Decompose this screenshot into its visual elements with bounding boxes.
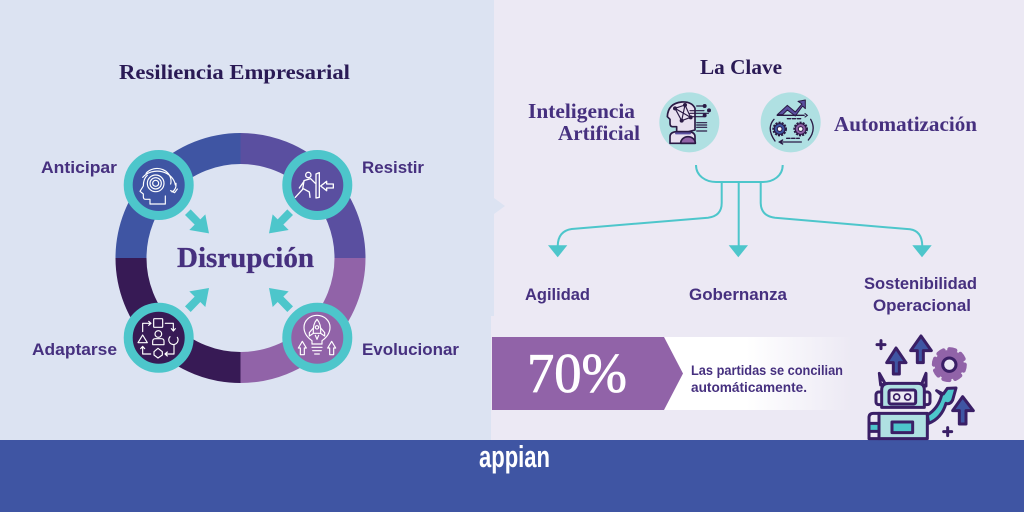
label: Automatización: Automatización (834, 112, 977, 136)
gear (938, 354, 960, 376)
heading: Resiliencia Empresarial: Resiliencia Empresarial (119, 60, 350, 84)
icon: artificial intelligence head (659, 92, 719, 152)
callout text (691, 363, 843, 395)
stat: 70%: 70% (527, 343, 627, 405)
label: Gobernanza: Gobernanza (689, 285, 788, 304)
connector: bracket and arrows (548, 165, 932, 257)
callout text: automáticamente. (691, 380, 807, 395)
icon: rocket in lightbulb (298, 315, 336, 355)
label: Sostenibilidad Operacional: Sostenibilidad (864, 274, 977, 293)
diagram: resilience cycle (32, 148, 459, 368)
label: Sostenibilidad Operacional: Operacional (873, 296, 971, 315)
callout text: Las partidas se concilian (691, 363, 843, 378)
robot ears (876, 392, 883, 405)
callout background (660, 337, 852, 410)
sparkles (877, 341, 952, 436)
panel: footer band (0, 440, 1024, 512)
icon: process shapes (138, 319, 178, 358)
robot left arm (869, 413, 879, 439)
label: Inteligencia Artificial: Inteligencia (528, 99, 635, 123)
panel: right background (491, 0, 1024, 440)
icon: robot with arrows and gear (869, 336, 973, 439)
label: Anticipar: Anticipar (41, 158, 117, 177)
robot head (882, 383, 924, 407)
callout: 70% statistic (492, 337, 852, 410)
label: Inteligencia Artificial: Artificial (558, 121, 640, 145)
callout arrow (492, 337, 683, 410)
node: Evolucionar (287, 307, 348, 368)
node: Adaptarse (128, 307, 189, 368)
label: Inteligencia Artificial (528, 99, 640, 145)
node: Anticipar (128, 154, 189, 216)
icon: automation gears (761, 92, 821, 152)
node: Resistir (287, 154, 348, 216)
icon: person pushing door (295, 172, 333, 198)
label: Disrupción: Disrupción (177, 243, 314, 274)
logo: appian: appian (479, 439, 550, 474)
label: Agilidad: Agilidad (525, 285, 590, 304)
heading: La Clave: La Clave (700, 55, 782, 79)
label: Resistir: Resistir (362, 158, 424, 177)
label: Evolucionar: Evolucionar (362, 340, 459, 359)
arrows pointing to centre (185, 209, 293, 312)
label: Adaptarse: Adaptarse (32, 340, 117, 359)
label: Sostenibilidad Operacional (864, 274, 977, 315)
robot torso (879, 413, 927, 439)
robot antennae (879, 373, 926, 386)
icon: head with clock (140, 168, 177, 204)
arrows (887, 336, 973, 424)
robot right arm (927, 388, 956, 423)
ring segments (131, 148, 350, 368)
